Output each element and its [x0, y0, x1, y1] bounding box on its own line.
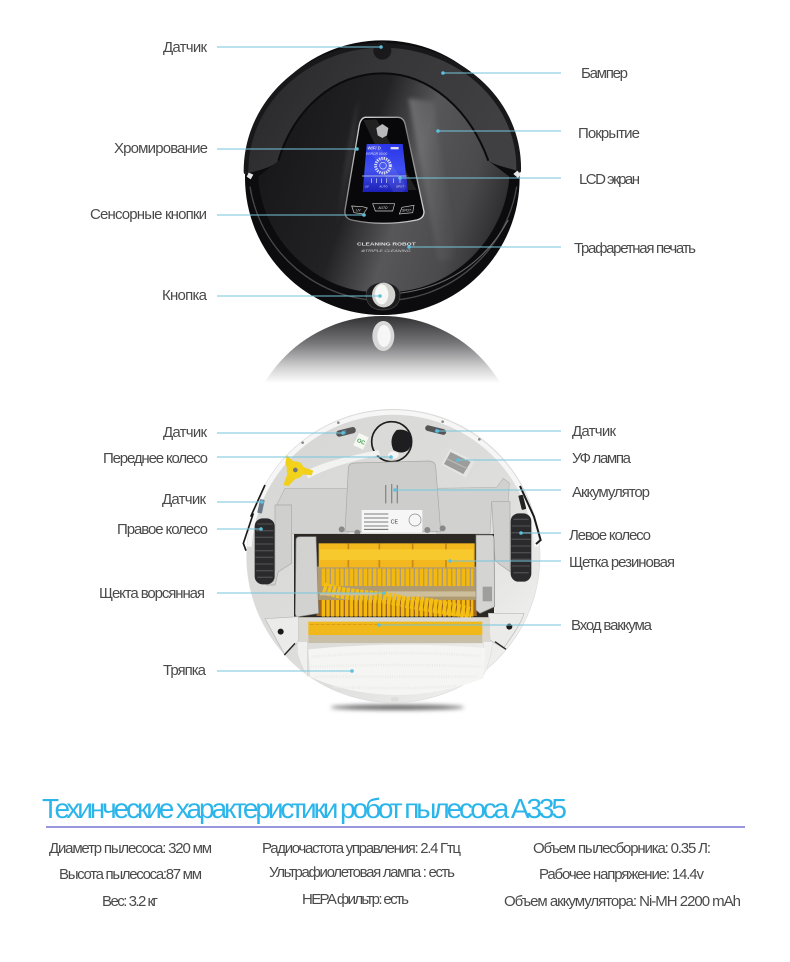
spec: УФ лампа: Ультрафиолетовая лампа : есть	[269, 864, 455, 881]
callout: Щетка резиновая	[448, 554, 675, 571]
mop holders	[265, 613, 524, 655]
spec: напряжение: Рабочее напряжение: 14.4v	[539, 866, 704, 883]
callout: Датчик	[163, 39, 383, 56]
callout: Сенсорные кнопки: Сенсорные кнопки	[90, 206, 207, 223]
callout: Щекта ворсянная	[99, 585, 386, 602]
callout: Левое колесо: Левое колесо	[569, 527, 651, 544]
top sensor	[373, 42, 391, 60]
reflection of robot	[266, 316, 498, 380]
callout: Щетка резиновая: Щетка резиновая	[569, 554, 675, 571]
title: Техинческие характеристики робот пылесоса A335	[42, 793, 567, 824]
callout: Правое колесо	[117, 521, 263, 538]
mop cloth	[297, 642, 493, 701]
LCD panel	[345, 117, 424, 223]
callout: УФ лампа: УФ лампа	[572, 450, 632, 467]
green tag: OC	[356, 438, 366, 447]
callout: Датчик: Датчик	[163, 39, 207, 56]
blue LCD screen: AUTO	[378, 185, 388, 189]
callout: Кнопка	[162, 287, 382, 304]
touch buttons	[352, 204, 414, 214]
spec: HEPA: HEPA фильтр: есть	[302, 891, 409, 908]
callout: Датчик (боковой): Датчик	[162, 491, 206, 508]
blue LCD screen: UV	[365, 185, 370, 189]
left side sensor	[243, 485, 265, 551]
UV lamp	[441, 449, 475, 478]
power button	[366, 282, 400, 310]
printed logo: ⊛TRIPLE CLEANING	[361, 249, 411, 253]
left wheel (right on image)	[492, 502, 531, 582]
callout: Переднее колесо	[103, 450, 393, 467]
battery cover	[339, 461, 446, 536]
printed logo: CLEANING ROBOT	[357, 242, 416, 247]
callout: Тряпка: Тряпка	[163, 662, 207, 679]
callout: LCD экран	[398, 171, 640, 188]
rubber brush	[319, 543, 475, 567]
callout: Кнопка: Кнопка	[162, 287, 208, 304]
callout: Датчик (справа): Датчик	[572, 423, 616, 440]
robot bottom view	[243, 409, 541, 710]
touch buttons: UV	[356, 209, 361, 213]
callout: Бампер	[441, 65, 628, 82]
callout: Аккумулятор: Аккумулятор	[572, 484, 650, 501]
robot underside body	[247, 409, 540, 703]
callout: Бампер: Бампер	[581, 65, 628, 82]
callout: Тряпка	[163, 662, 354, 679]
callout: Вход ваккума: Вход ваккума	[571, 617, 653, 634]
callout: Хромирование	[114, 140, 359, 157]
robot body	[245, 40, 520, 315]
spec: диаметр: Диаметр пылесоса: 320 мм	[49, 840, 212, 857]
callout: Щекта ворсянная: Щекта ворсянная	[99, 585, 205, 602]
callout: LCD экран: LCD экран	[579, 171, 640, 188]
callout: Левое колесо	[519, 527, 651, 544]
callout: Вход ваккума	[377, 617, 653, 634]
callout: Сенсорные кнопки	[90, 206, 366, 223]
callout: Трафаретная печать	[407, 240, 696, 257]
bumper	[244, 43, 521, 179]
brush compartment	[294, 534, 495, 617]
left sensor	[335, 426, 356, 437]
bristle brush	[320, 577, 477, 613]
touch buttons: SPOT	[402, 208, 412, 212]
callout: Аккумулятор	[393, 484, 650, 501]
spec: высота: Высота пылесоса:87 мм	[59, 866, 202, 883]
spec: вес: Вес: 3.2 кг	[102, 893, 159, 910]
blue LCD screen: ERROR 00:00	[366, 152, 387, 156]
floor shadow	[331, 705, 464, 710]
callout: УФ лампа	[456, 450, 632, 467]
title underline	[46, 826, 745, 828]
right side sensor	[518, 486, 541, 544]
vacuum inlet	[298, 617, 490, 643]
printed logo	[357, 242, 416, 253]
robot top view	[244, 40, 522, 380]
callout: Покрытие	[436, 125, 640, 142]
callout: Датчик (справа)	[435, 423, 616, 440]
battery label: CE	[391, 519, 399, 525]
spec: радиочастота: Радиочастота управления: 2.4 Гтц	[262, 840, 461, 857]
blue LCD screen	[362, 144, 408, 192]
spec: объем пылесборника: Объем пылесборника: 0.35 Л:	[533, 840, 711, 857]
right wheel (left on image)	[255, 505, 292, 585]
callout: Переднее колесо: Переднее колесо	[103, 450, 208, 467]
callout: Датчик (боковой)	[162, 491, 264, 508]
side brush	[283, 450, 380, 486]
brush end caps	[295, 537, 319, 617]
callout: Датчик (низ)	[163, 424, 345, 441]
callout: Хромирование: Хромирование	[114, 140, 208, 157]
spec: аккумулятор: Объем аккумулятора: Ni-MH 2200 mAh	[504, 893, 741, 910]
specifications table	[49, 840, 741, 910]
callout: Датчик (низ): Датчик	[163, 424, 207, 441]
touch buttons: AUTO	[377, 206, 388, 210]
callout: Трафаретная печать: Трафаретная печать	[574, 240, 696, 257]
right sensor	[425, 425, 447, 435]
blue LCD screen: SPOT	[396, 185, 404, 189]
green tag	[353, 433, 369, 450]
callout: Покрытие: Покрытие	[578, 125, 640, 142]
blue LCD screen: WIFI D	[367, 146, 381, 151]
front caster wheel	[372, 422, 412, 462]
callout: Правое колесо: Правое колесо	[117, 521, 208, 538]
